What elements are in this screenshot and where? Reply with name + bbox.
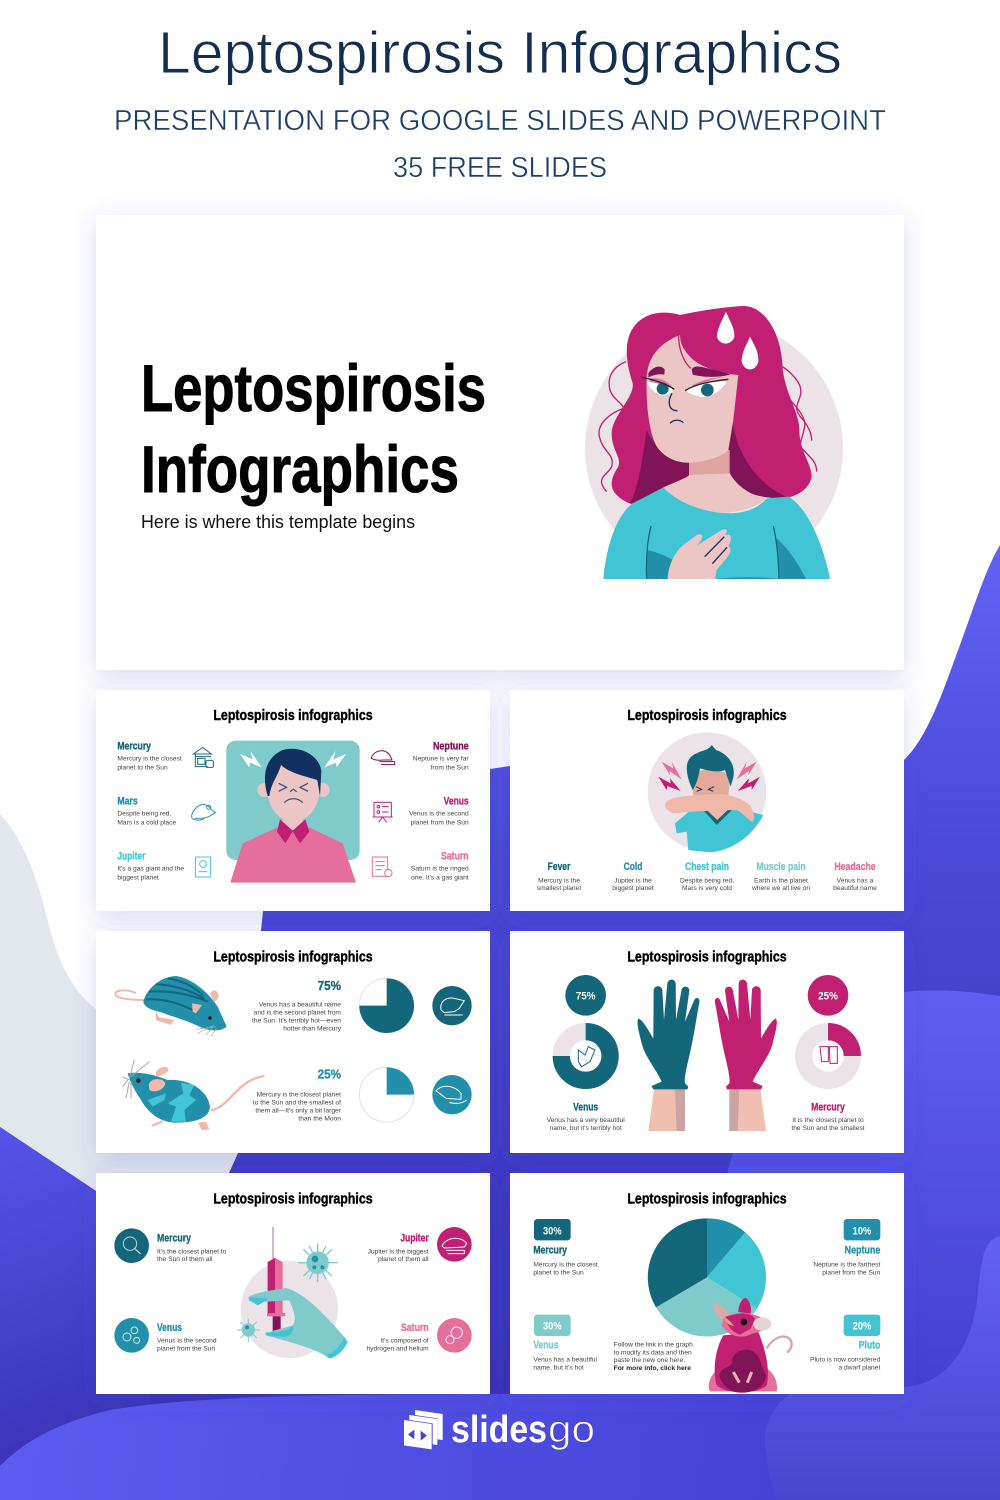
- right labels: Saturn: [441, 850, 469, 862]
- illustration: magenta glove and arm: [715, 980, 777, 1131]
- labels row: Cold: [624, 861, 642, 873]
- item: Saturn: Saturn: [401, 1322, 429, 1334]
- stat: 25% text: them all—It's only a bit larger: [255, 1108, 342, 1115]
- stat: 75% text: and is the second planet from: [254, 1010, 341, 1017]
- donut chart: 25%: [804, 1032, 852, 1080]
- item: Saturn: It's composed of: [380, 1337, 429, 1344]
- item: Venus: [114, 1318, 217, 1353]
- item: Venus: Venus: [157, 1322, 182, 1334]
- pie chart: 25%: [359, 1067, 414, 1122]
- badge: 25%: [808, 975, 848, 1016]
- label: Venus: name, but it's terribly hot: [550, 1125, 622, 1132]
- item: Mercury: Mercury: [157, 1233, 192, 1245]
- slide title: Leptospirosis infographics: [213, 1192, 373, 1208]
- stat: 75% text: Venus has a beautiful name: [259, 1002, 341, 1009]
- slide title: Leptospirosis infographics: [213, 708, 373, 724]
- item: Jupiter: planet of them all: [378, 1256, 429, 1263]
- labels row: Headache: [834, 861, 876, 873]
- stat: 25% text: to the Sun and the smallest of: [253, 1100, 341, 1107]
- left labels: Jupiter: [117, 850, 146, 862]
- note text: For more info, click here: [614, 1365, 691, 1372]
- label: Venus: Venus: [573, 1102, 598, 1114]
- stat: 75% text: [252, 979, 342, 1033]
- slide title: Leptospirosis infographics: [627, 708, 787, 724]
- illustration: teal glove and arm: [638, 980, 700, 1131]
- item: Mercury 30%: planet to the Sun: [533, 1270, 584, 1277]
- labels row: Muscle pain: [756, 861, 806, 873]
- label: Venus: Venus has a very beautiful: [547, 1117, 625, 1124]
- labels row: [537, 861, 877, 892]
- stat: 25% text: than the Moon: [298, 1115, 341, 1122]
- labels row: smallest planet: [537, 885, 581, 892]
- right labels: Neptune: [433, 740, 469, 752]
- item: Jupiter: Jupiter is the biggest: [368, 1248, 429, 1255]
- left labels: Mercury is the closest: [117, 756, 182, 763]
- page title: Leptospirosis Infographics: [158, 20, 842, 86]
- labels row: Mars is very cold: [682, 885, 732, 892]
- right labels: Neptune is very far: [413, 756, 469, 763]
- logo: slidesgo: [404, 1409, 595, 1451]
- right labels: Venus is the second: [409, 811, 469, 818]
- left labels: It's a gas giant and the: [117, 866, 184, 873]
- item: Pluto 20%: [810, 1315, 881, 1372]
- illustration: striped rat: [115, 976, 227, 1036]
- left labels: planet to the Sun: [117, 765, 168, 772]
- note text: paste the new one here.: [614, 1357, 685, 1364]
- slide title: Leptospirosis infographics: [213, 950, 373, 966]
- item: Venus 30%: name, but it's hot: [533, 1365, 584, 1372]
- label: Mercury: the Sun and the smallest: [791, 1125, 865, 1132]
- labels row: where we all live on: [751, 885, 810, 892]
- badge: 75%: [565, 975, 606, 1016]
- icon: presentation board: [373, 802, 393, 822]
- illustration: woman with chest pain: [585, 306, 843, 579]
- panel: pie chart with rat slide: [510, 1173, 904, 1394]
- labels row: Earth is the planet: [754, 877, 808, 884]
- item: Pluto 20%: Pluto is now considered: [810, 1357, 881, 1364]
- labels row: Despite being red,: [680, 877, 734, 884]
- stat: 75% text: 75%: [318, 979, 341, 993]
- item: Saturn: [366, 1318, 472, 1353]
- item: Mercury: the Sun of them all: [157, 1256, 213, 1263]
- item: Mercury 30%: Mercury is the closest: [533, 1262, 598, 1269]
- cover heading: Infographics: [141, 432, 459, 506]
- right labels: planet from the Sun: [411, 820, 469, 827]
- item: Venus 30%: Venus has a beautiful: [533, 1357, 598, 1364]
- cover heading: Leptospirosis: [141, 351, 486, 425]
- illustration: man with headache: [226, 741, 360, 883]
- note text: [614, 1341, 693, 1372]
- item: Venus 30%: [533, 1315, 598, 1372]
- badge: 75%: 75%: [576, 990, 596, 1002]
- panel: gloves slide: [510, 931, 904, 1153]
- right labels: [409, 740, 469, 882]
- item: Pluto 20%: 20%: [853, 1320, 872, 1332]
- labels row: Jupiter is the: [614, 877, 652, 884]
- stat: 75% text: the Sun. It's terribly hot—even: [252, 1018, 341, 1025]
- item: Neptune 10%: 10%: [853, 1225, 872, 1237]
- stat: 75% text: hotter than Mercury: [283, 1026, 342, 1033]
- item: Neptune 10%: Neptune: [845, 1244, 880, 1256]
- item: Neptune 10%: Neptune is the farthest: [813, 1262, 880, 1269]
- left labels: Mercury: [117, 740, 152, 752]
- illustration: person coughing: [648, 732, 766, 852]
- slide title: Leptospirosis infographics: [627, 1192, 787, 1208]
- icon: mouse badge: [432, 1075, 472, 1114]
- left labels: Mars: [117, 795, 138, 807]
- cover heading: [141, 351, 486, 506]
- illustration: magenta rat: [709, 1298, 792, 1393]
- item: Neptune 10%: [813, 1219, 881, 1277]
- note text: to modify its data and then: [614, 1349, 692, 1356]
- labels row: Fever: [548, 861, 571, 873]
- icon: house: [193, 747, 213, 767]
- right labels: from the Sun: [431, 765, 469, 772]
- labels row: Chest pain: [685, 861, 729, 873]
- right labels: one. It's a gas giant: [411, 875, 469, 882]
- item: Pluto 20%: Pluto: [859, 1339, 880, 1351]
- item: Venus: Venus is the second: [157, 1337, 217, 1344]
- labels row: Venus has a: [837, 877, 874, 884]
- slide title: Leptospirosis infographics: [627, 950, 787, 966]
- left labels: Despite being red,: [117, 811, 172, 818]
- left labels: Mars is a cold place: [117, 820, 176, 827]
- icon: rat badge: [432, 986, 472, 1025]
- item: Jupiter: Jupiter: [400, 1233, 429, 1245]
- illustration: gloved hand with syringe and viruses: [237, 1227, 348, 1359]
- icon: book: [195, 857, 211, 877]
- item: Neptune 10%: planet from the Sun: [822, 1270, 881, 1277]
- labels row: biggest planet: [612, 885, 654, 892]
- item: Mercury 30%: 30%: [543, 1225, 562, 1237]
- panel: main cover slide: [96, 215, 904, 670]
- subtitle line 1: PRESENTATION FOR GOOGLE SLIDES AND POWERPOINT: [114, 105, 886, 137]
- item: Pluto 20%: a dwarf planet: [839, 1365, 880, 1372]
- subtitle line 2: 35 FREE SLIDES: [393, 152, 607, 184]
- wordmark: go: go: [548, 1409, 595, 1451]
- item: Venus 30%: Venus: [533, 1339, 558, 1351]
- donut chart: 75%: [561, 1032, 610, 1080]
- labels row: beautiful name: [833, 885, 877, 892]
- icon: stacked slides: [404, 1410, 443, 1449]
- item: Venus: planet from the Sun: [157, 1345, 215, 1352]
- labels row: Mercury is the: [538, 877, 580, 884]
- icon: mouse: [192, 804, 215, 820]
- icon: rat outline: [371, 751, 395, 765]
- right labels: Saturn is the ringed: [411, 866, 469, 873]
- panel: symptoms row slide: [510, 690, 904, 911]
- wordmark: slides: slides: [451, 1409, 547, 1451]
- pie chart: 75%: [359, 978, 414, 1033]
- label: Venus: [547, 1102, 625, 1132]
- item: Saturn: hydrogen and helium: [366, 1345, 429, 1352]
- stat: 25% text: 25%: [318, 1068, 341, 1082]
- badge: 25%: 25%: [818, 990, 838, 1002]
- item: Venus 30%: 30%: [543, 1320, 562, 1332]
- note text: Follow the link in the graph: [614, 1341, 693, 1348]
- stat: 25% text: [253, 1068, 342, 1122]
- item: Mercury: It's the closest planet to: [157, 1248, 227, 1255]
- left labels: [117, 740, 184, 882]
- label: Mercury: Mercury: [811, 1102, 845, 1114]
- item: Mercury 30%: Mercury: [533, 1244, 568, 1256]
- panel: mice pie charts slide: [96, 931, 490, 1153]
- illustration: mouse with bands: [123, 1060, 264, 1130]
- panel: symptoms with icons slide: [96, 690, 490, 911]
- cover subtitle: Here is where this template begins: [141, 512, 415, 532]
- right labels: Venus: [444, 795, 469, 807]
- item: Mercury: [114, 1228, 227, 1263]
- panel: syringe slide: [96, 1173, 490, 1394]
- pie chart: [648, 1218, 766, 1337]
- left labels: biggest planet: [117, 875, 159, 882]
- item: Jupiter: [368, 1227, 472, 1263]
- label: Mercury: [791, 1102, 865, 1132]
- stat: 25% text: Mercury is the closest planet: [257, 1092, 341, 1099]
- icon: document: [372, 857, 392, 877]
- item: Mercury 30%: [533, 1219, 598, 1277]
- label: Mercury: It is the closest planet to: [792, 1117, 864, 1124]
